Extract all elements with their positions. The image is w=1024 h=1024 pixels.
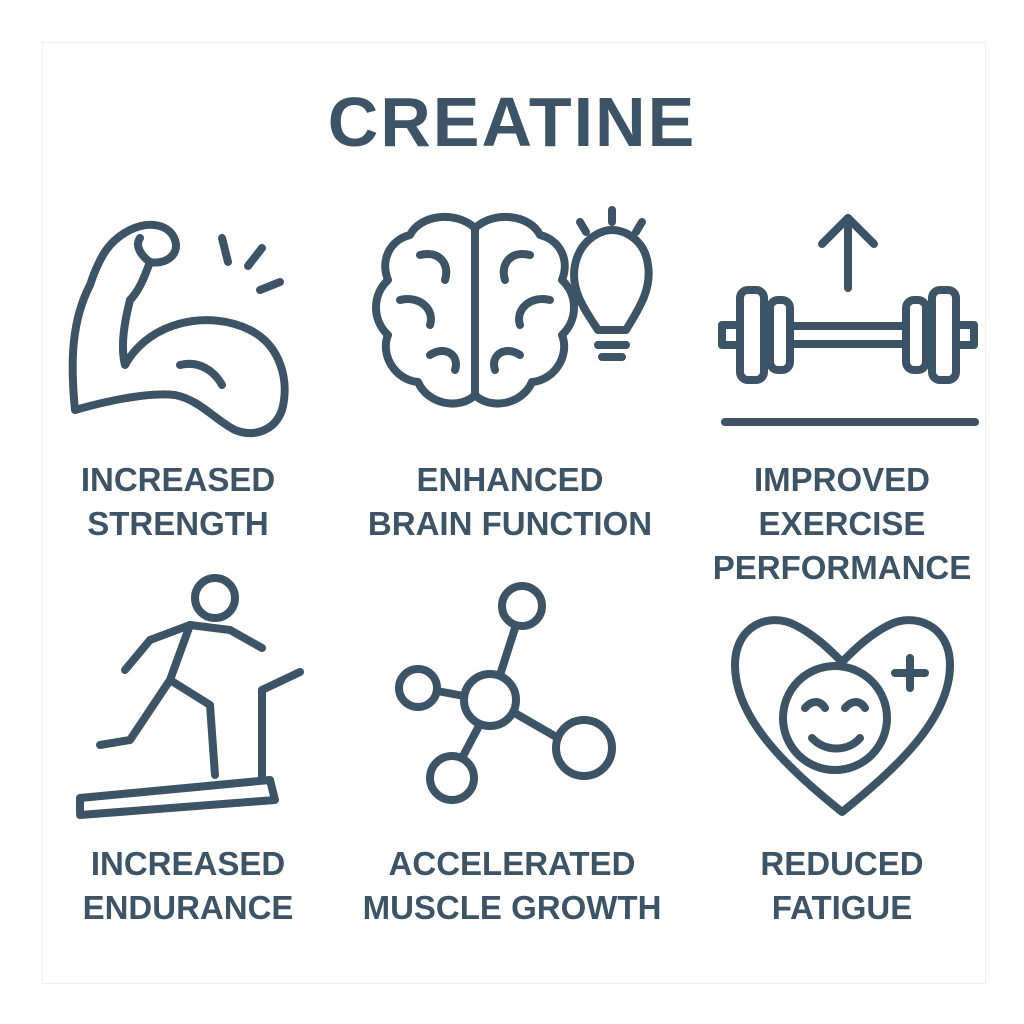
label: improved exercise performance: EXERCISE	[759, 505, 925, 542]
label: increased strength	[81, 461, 275, 542]
label: increased strength: INCREASED	[81, 461, 275, 498]
label: improved exercise performance	[713, 461, 971, 586]
icon: treadmill runner	[80, 578, 300, 815]
label: enhanced brain function	[368, 461, 652, 542]
label: enhanced brain function: ENHANCED	[416, 461, 604, 498]
label: increased endurance: INCREASED	[91, 845, 285, 882]
label: accelerated muscle growth: MUSCLE GROWTH	[363, 889, 661, 926]
label: improved exercise performance: PERFORMANCE	[713, 549, 971, 586]
icon: molecule	[399, 586, 612, 800]
label: reduced fatigue	[760, 845, 924, 926]
icon: flexed arm	[73, 225, 285, 433]
icon: heart with smile	[735, 620, 950, 812]
label: reduced fatigue: REDUCED	[760, 845, 924, 882]
label: accelerated muscle growth: ACCELERATED	[389, 845, 635, 882]
label: enhanced brain function: BRAIN FUNCTION	[368, 505, 652, 542]
label: improved exercise performance: IMPROVED	[754, 461, 930, 498]
icon: brain and lightbulb	[376, 210, 649, 404]
icon: barbell with up arrow	[722, 218, 975, 422]
label: reduced fatigue: FATIGUE	[772, 889, 912, 926]
title: CREATINE	[328, 83, 696, 161]
label: increased endurance	[83, 845, 293, 926]
label: increased endurance: ENDURANCE	[83, 889, 293, 926]
label: accelerated muscle growth	[363, 845, 661, 926]
label: increased strength: STRENGTH	[87, 505, 269, 542]
